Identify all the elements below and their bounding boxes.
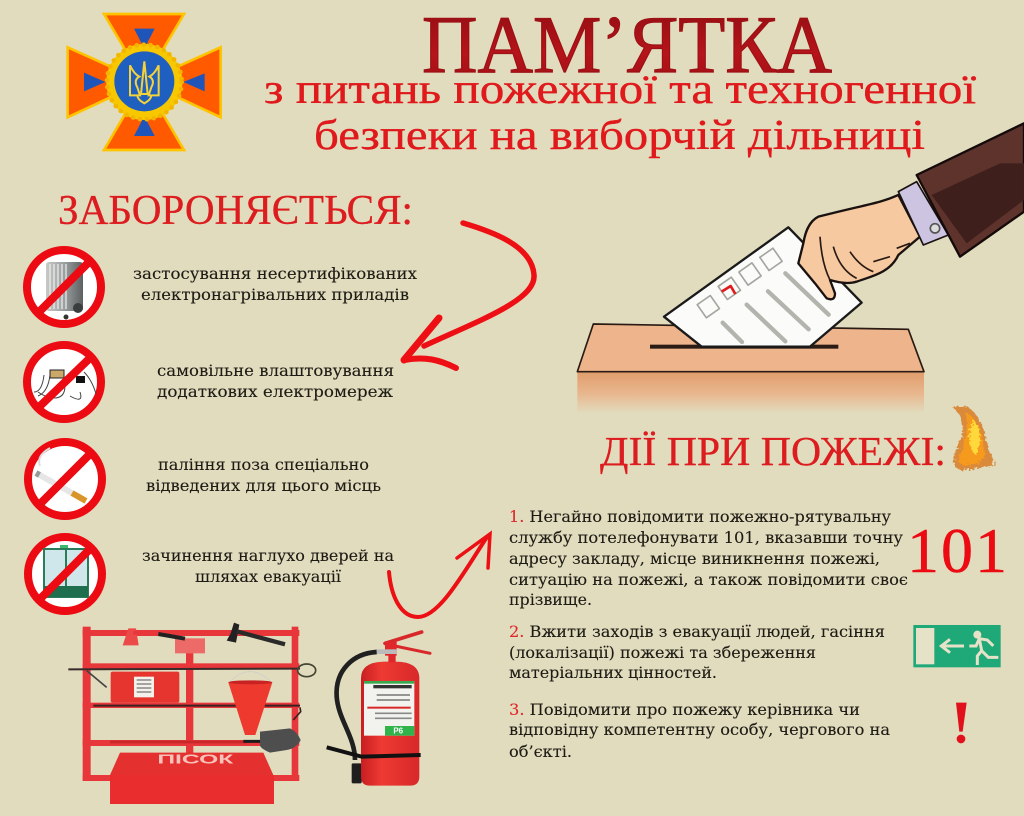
text: heaters: електронагрівальних приладів <box>141 286 409 304</box>
text: step 2: (локалізації) пожежі та збереження <box>509 644 816 662</box>
text: step 1: прізвище. <box>509 591 592 609</box>
ballot paper <box>664 227 862 347</box>
illustration: fire equipment stand: ПІСОК <box>157 753 234 767</box>
text: wiring: додаткових електромереж <box>157 383 394 401</box>
text: doors: шляхах евакуації <box>195 568 341 586</box>
hand <box>798 195 920 299</box>
subtitle <box>264 67 976 159</box>
text: step 1: адресу закладу, місце виникнення пожежі, <box>509 550 880 568</box>
icon: exit sign <box>913 625 1001 667</box>
text: step 3: відповідну компетентну особу, чергового на <box>509 721 890 739</box>
text: step 3: об’єкті. <box>509 743 572 761</box>
emblem: state emergency service cross <box>68 14 221 150</box>
text: doors: зачинення наглухо дверей на <box>142 547 394 565</box>
text: wiring <box>157 362 394 401</box>
arrow: to prohibitions <box>404 223 534 368</box>
text: heaters <box>133 265 417 304</box>
text: step 1 <box>509 508 908 609</box>
subtitle: з питань пожежної та техногенної <box>264 67 976 113</box>
shirt cuff <box>898 182 948 245</box>
text: step 3 <box>509 701 890 761</box>
icon: no blocked doors <box>28 537 102 611</box>
icon: exclamation mark <box>956 703 967 743</box>
icon: flame <box>952 406 994 470</box>
text: step 1: службу потелефонувати 101, вказавши точну <box>509 529 903 547</box>
icon: no extra wiring <box>27 345 101 419</box>
text: heaters: застосування несертифікованих <box>133 265 417 283</box>
heading: actions in case of fire: ДІЇ ПРИ ПОЖЕЖІ: <box>600 428 946 474</box>
text: step 2: матеріальних цінностей. <box>509 664 717 682</box>
illustration: fire equipment stand <box>68 623 316 804</box>
illustration: fire extinguisher: Р6 <box>393 727 404 736</box>
text: doors <box>142 547 394 586</box>
text: wiring: самовільне влаштовування <box>157 362 394 380</box>
illustration: ballot box and hand <box>577 123 1024 413</box>
title: ПАМ'ЯТКА: ПАМ’ЯТКА <box>422 0 832 90</box>
text: step 2: 2. Вжити заходів з евакуації людей, гасіння <box>509 623 885 641</box>
text: step 1: 1. Негайно повідомити пожежно-рятувальну <box>509 508 891 526</box>
text: smoking <box>146 456 381 495</box>
text: smoking: відведених для цього місць <box>146 477 381 495</box>
number: 101: 101 <box>907 515 1007 586</box>
illustration: fire extinguisher <box>327 632 430 786</box>
icon: no smoking <box>28 442 102 516</box>
ballot box <box>577 324 924 413</box>
text: step 2 <box>509 623 885 682</box>
icon: no heaters <box>27 250 101 324</box>
arrow: to actions <box>389 534 490 617</box>
jacket sleeve <box>917 123 1024 257</box>
text: smoking: паління поза спеціально <box>158 456 369 474</box>
subtitle: безпеки на виборчій дільниці <box>314 113 925 159</box>
text: step 3: 3. Повідомити про пожежу керівника чи <box>509 701 860 719</box>
text: step 1: ситуацію на пожежі, а також повідомити своє <box>509 571 908 589</box>
heading: prohibited: ЗАБОРОНЯЄТЬСЯ: <box>58 188 413 234</box>
